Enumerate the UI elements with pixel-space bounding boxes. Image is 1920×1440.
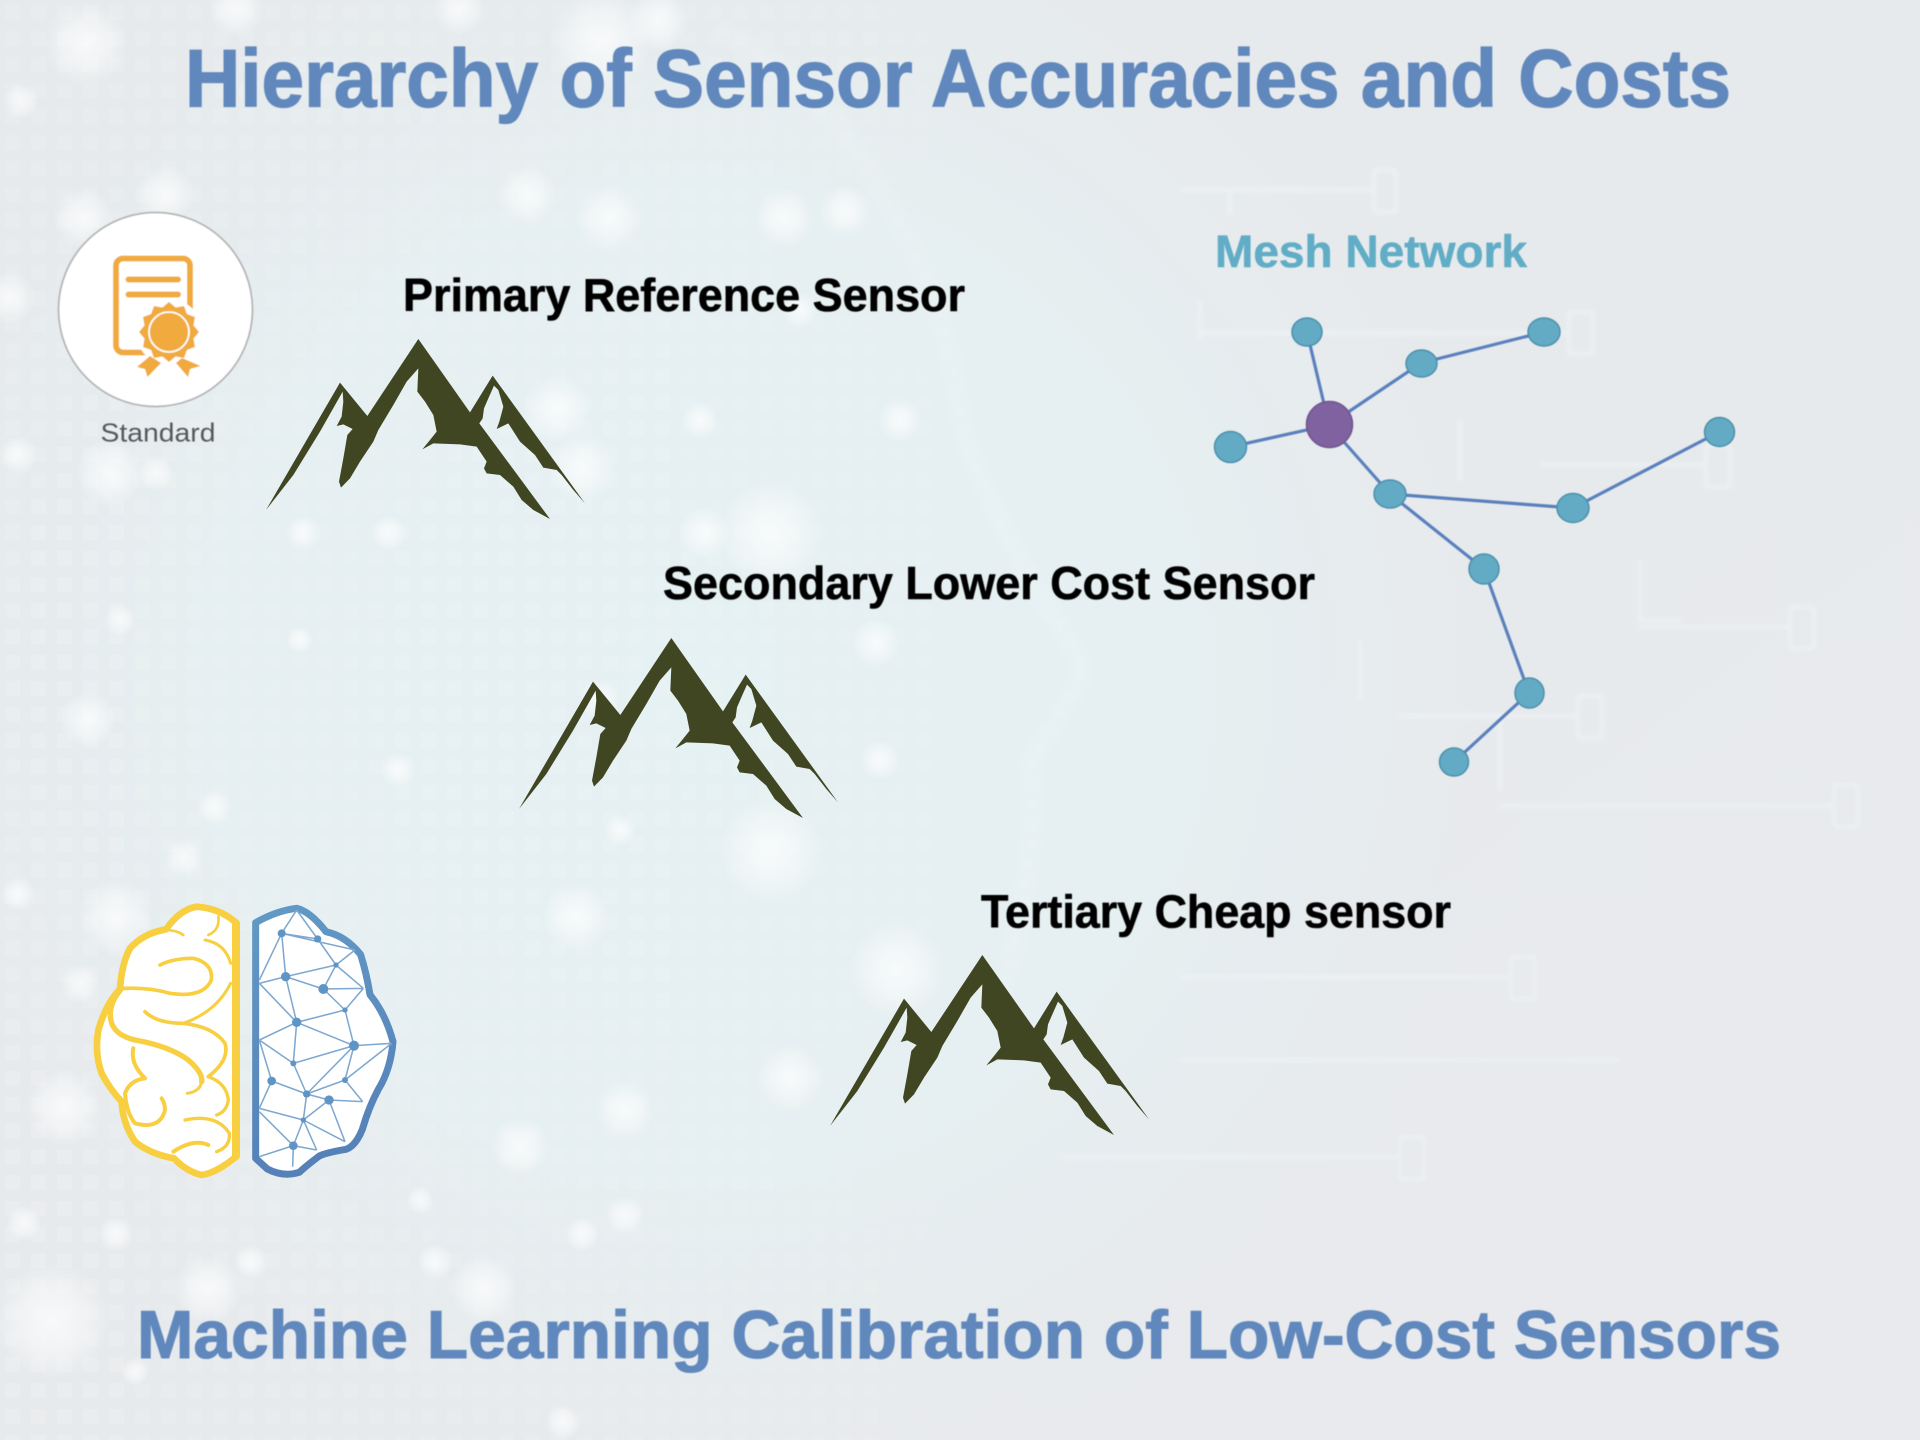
icon: primary sensor mountain	[266, 339, 585, 519]
left brain hemisphere	[97, 907, 236, 1175]
decorative head glow	[720, 30, 1085, 1000]
standard label: Standard	[100, 418, 216, 448]
background	[0, 0, 932, 1432]
secondary sensor label: Secondary Lower Cost Sensor	[663, 557, 1315, 609]
icon: secondary sensor mountain	[519, 638, 838, 818]
network links	[1230, 332, 1719, 762]
standard certificate badge	[58, 212, 252, 406]
right brain hemisphere	[256, 908, 393, 1174]
tertiary sensor label: Tertiary Cheap sensor	[981, 886, 1451, 938]
badge circle	[58, 212, 252, 406]
title: Hierarchy of Sensor Accuracies and Costs	[185, 34, 1731, 124]
footer title: Machine Learning Calibration of Low-Cost Sensors	[137, 1297, 1781, 1373]
mesh network diagram	[1214, 318, 1734, 776]
gateway node	[1306, 402, 1352, 448]
mesh network heading: Mesh Network	[1215, 226, 1528, 277]
primary sensor label: Primary Reference Sensor	[403, 269, 965, 321]
sensor nodes	[1214, 318, 1734, 776]
icon: tertiary sensor mountain	[830, 955, 1149, 1135]
icon: brain	[97, 907, 393, 1175]
icon: certificate	[116, 258, 202, 377]
